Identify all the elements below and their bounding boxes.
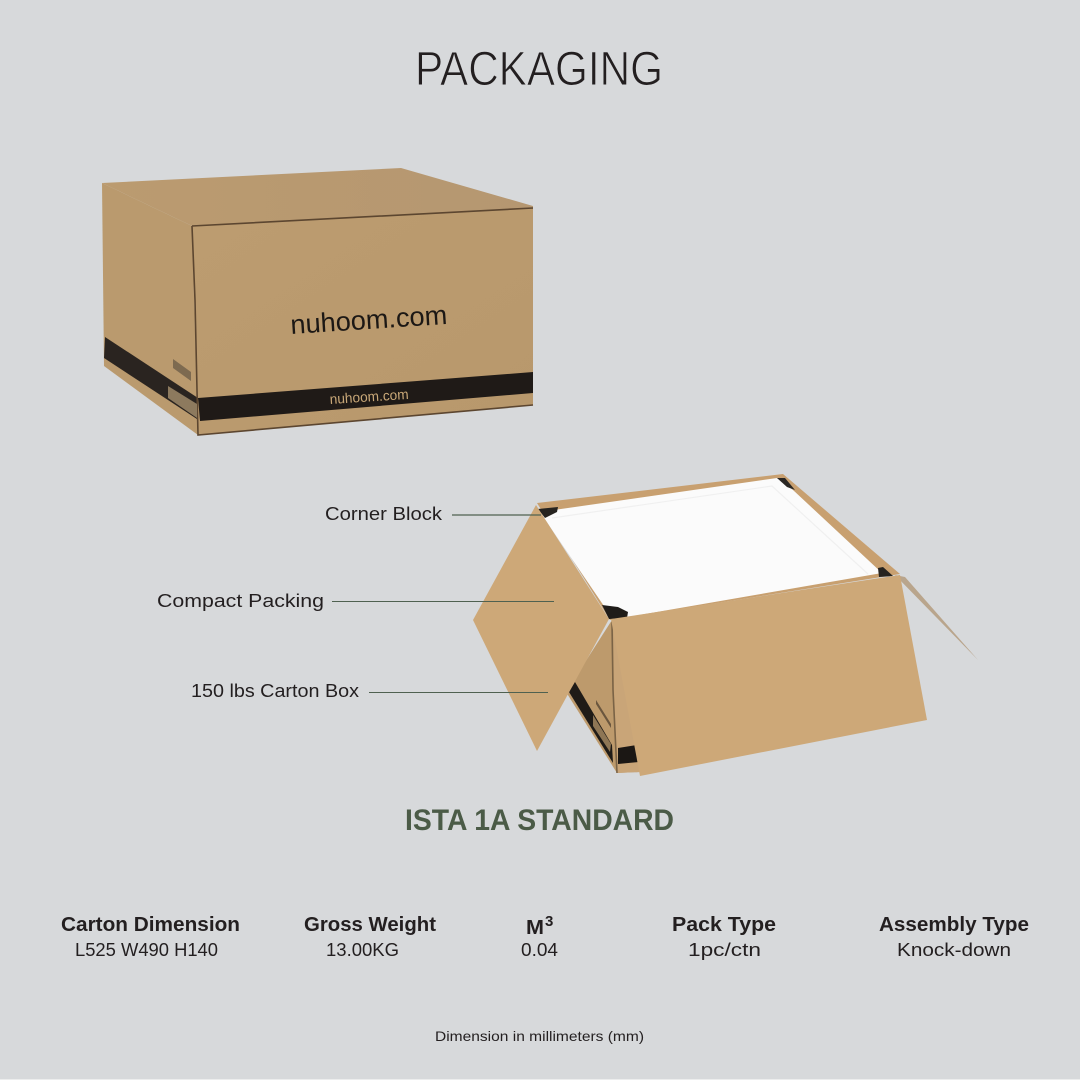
label: corner block: Corner Block	[325, 504, 443, 524]
spec: carton dimension: L525 W490 H140	[75, 940, 218, 960]
corner block right	[878, 567, 893, 577]
back rim	[537, 474, 900, 620]
foam inner edge	[552, 486, 868, 574]
box logo: nuhoom.com	[289, 300, 448, 340]
box side barcode	[168, 386, 197, 418]
footnote: Dimension in millimeters (mm)	[435, 1028, 644, 1044]
spec: pack type: 1pc/ctn	[688, 940, 761, 960]
spec: volume	[521, 913, 558, 960]
box left face	[102, 183, 198, 435]
corner block front	[602, 605, 628, 619]
standard heading: ISTA 1A STANDARD	[405, 804, 674, 837]
left flap	[473, 505, 609, 751]
spec: carton dimension	[61, 914, 240, 960]
side seam	[612, 622, 617, 773]
side barcode	[593, 715, 611, 752]
box side print mark	[173, 359, 191, 381]
spec: gross weight	[304, 914, 436, 960]
side wall	[566, 620, 640, 773]
open carton box	[473, 474, 978, 776]
spec: pack type	[672, 914, 776, 960]
label: compact packing: Compact Packing	[157, 591, 324, 611]
closed carton box	[102, 168, 533, 435]
spec: assembly type: Assembly Type	[879, 914, 1029, 936]
front flap	[611, 575, 927, 776]
box left black band	[104, 337, 200, 421]
spec: volume: 3	[545, 913, 553, 930]
spec: volume: 0.04	[521, 940, 558, 960]
box band logo: nuhoom.com	[329, 386, 409, 407]
right flap	[895, 575, 978, 660]
box front black band	[198, 372, 533, 421]
box edges	[192, 208, 533, 435]
label: carton box: 150 lbs Carton Box	[191, 681, 359, 701]
spec: volume: M	[526, 917, 544, 939]
spec: gross weight: Gross Weight	[304, 914, 436, 936]
spec: carton dimension: Carton Dimension	[61, 914, 240, 936]
box front face	[192, 208, 533, 435]
spec: assembly type: Knock-down	[897, 940, 1011, 960]
corner block back left	[538, 507, 558, 518]
box top face	[102, 168, 533, 226]
side black band	[569, 682, 613, 763]
title: PACKAGING	[415, 43, 663, 96]
side print mark	[596, 700, 611, 728]
spec: gross weight: 13.00KG	[326, 940, 399, 960]
white foam packing	[540, 478, 882, 618]
side inner panel	[613, 620, 640, 773]
spec: pack type: Pack Type	[672, 914, 776, 936]
side band front	[618, 745, 639, 764]
spec: assembly type	[879, 914, 1029, 960]
corner block back right	[777, 478, 795, 490]
